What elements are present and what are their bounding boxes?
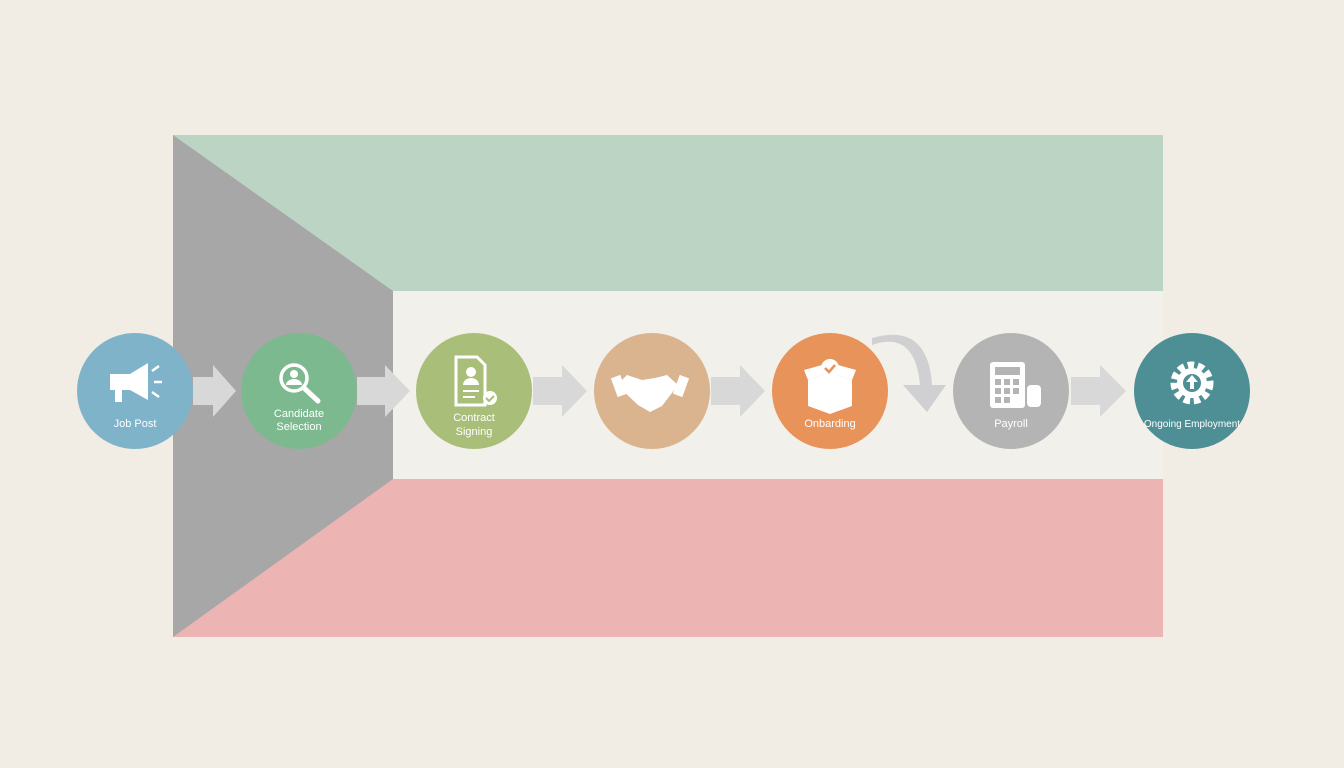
arrow 6 — [1071, 365, 1126, 417]
arrow 1 — [193, 365, 236, 417]
step: Contract Signing — [416, 333, 532, 449]
step: Onboarding — [772, 333, 888, 449]
icon: megaphone — [110, 363, 162, 402]
icon: box — [804, 359, 856, 414]
step: Contract Signing: Signing — [456, 426, 492, 438]
step: Candidate Selection — [241, 333, 357, 449]
step: Handshake — [594, 333, 710, 449]
icon: handshake — [611, 375, 689, 412]
step: Job Post — [77, 333, 193, 449]
icon: gear with arrow — [1175, 366, 1209, 400]
flag background panel — [173, 135, 1163, 637]
step: Ongoing Employment — [1134, 333, 1250, 449]
arrow 2 — [357, 365, 410, 417]
step: Candidate Selection: Selection — [276, 421, 322, 433]
curved arrow 5 — [872, 335, 946, 412]
icon: calculator — [990, 362, 1041, 408]
step: Contract Signing: Contract — [453, 412, 495, 424]
step: Payroll: Payroll — [994, 418, 1028, 430]
arrow 3 — [533, 365, 587, 417]
icon: magnifier — [281, 365, 318, 401]
step: Ongoing Employment: Ongoing Employment — [1144, 419, 1240, 430]
step: Job Post: Job Post — [114, 418, 156, 430]
arrow 4 — [711, 365, 765, 417]
step: Payroll — [953, 333, 1069, 449]
step: Candidate Selection: Candidate — [274, 408, 324, 420]
icon: contract — [456, 357, 497, 405]
step: Onboarding: Onbarding — [804, 418, 856, 430]
